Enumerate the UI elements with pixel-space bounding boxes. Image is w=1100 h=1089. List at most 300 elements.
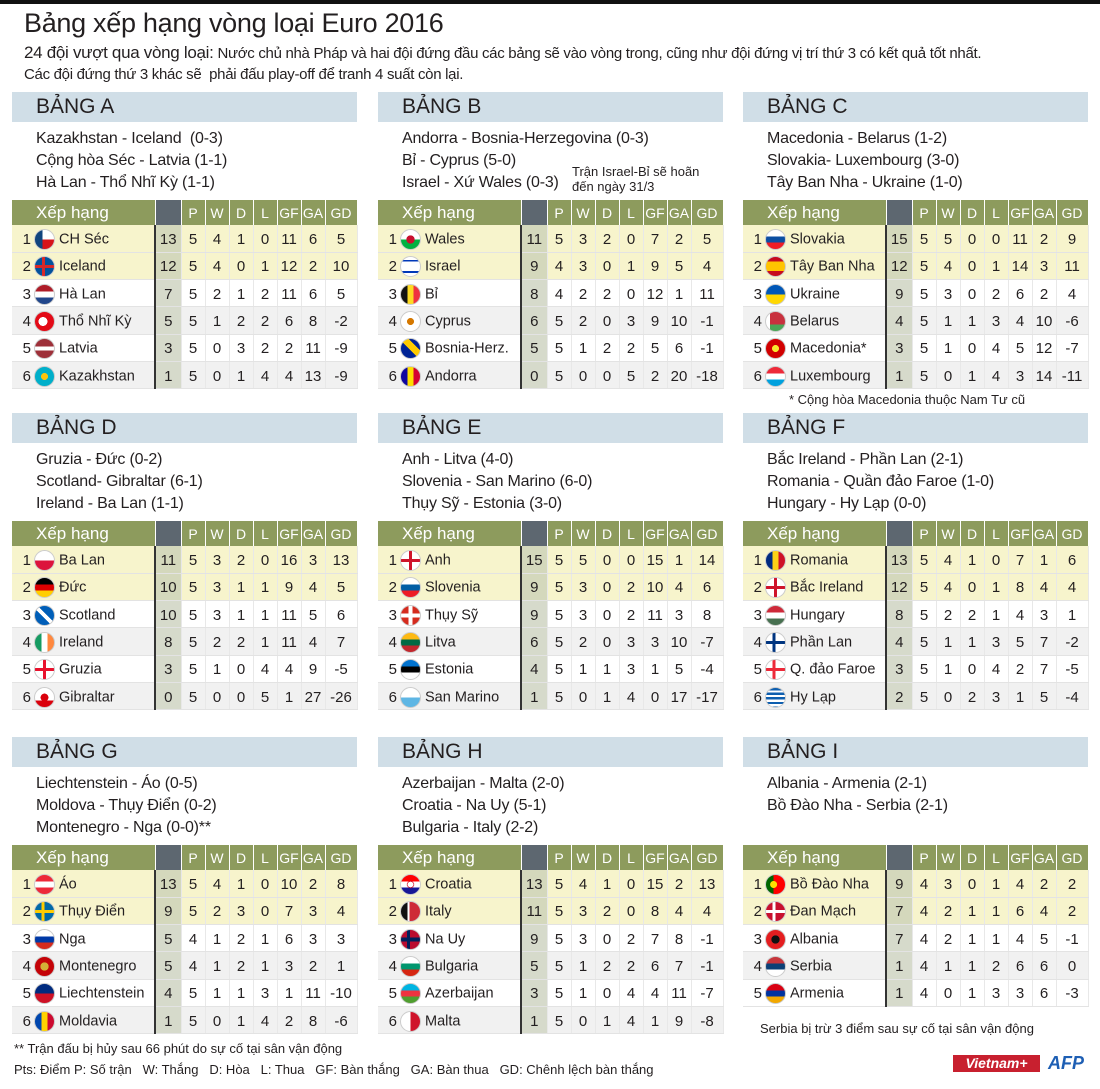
panel: group F: Hungary - Hy Lạp (0-0)	[767, 495, 926, 512]
panel: group G: GA	[303, 850, 323, 866]
panel: group A: 5	[189, 340, 197, 357]
panel: group F: 12	[891, 579, 908, 596]
panel: group E: 0	[603, 579, 611, 596]
panel: group C: 11	[1012, 231, 1028, 248]
legend: Pts: Điểm P: Số trận W: Thắng D: Hòa L: Thua GF: Bàn thắng GA: Bàn thua GD: Chênh lệch bàn thắng	[14, 1062, 654, 1077]
panel: group E: 2	[627, 607, 635, 624]
panel: group B: 1	[675, 286, 683, 303]
panel: group A: Hà Lan	[59, 286, 106, 302]
panel: group H: 1	[389, 876, 397, 893]
panel: group I: -1	[1065, 931, 1079, 948]
panel: group D: 5	[309, 607, 317, 624]
panel: group C: 2	[992, 286, 1000, 303]
panel: group I: 6	[1040, 958, 1048, 975]
panel: group I: 2	[1068, 876, 1076, 893]
panel: group C: 4	[895, 313, 903, 330]
panel: group C: Luxembourg	[790, 368, 871, 384]
panel: group G: 1	[23, 876, 31, 893]
panel: group A: 2	[309, 258, 317, 275]
panel: group C: 9	[895, 286, 903, 303]
panel: group A: W	[210, 204, 224, 220]
panel: group A: 13	[305, 368, 321, 385]
panel: group H: 5	[555, 985, 563, 1002]
panel: group F: 5	[1040, 689, 1048, 706]
subtitle	[24, 43, 981, 83]
panel: group C: Slovakia- Luxembourg (3-0)	[767, 152, 959, 169]
panel: group H: 0	[579, 1013, 587, 1030]
panel: group C: 1	[944, 313, 952, 330]
panel: group D: 6	[337, 607, 345, 624]
panel: group F: 0	[944, 689, 952, 706]
panel: group H: 5	[555, 931, 563, 948]
panel: group B: 2	[579, 313, 587, 330]
panel: group H: 6	[389, 1013, 397, 1030]
panel: group A: Latvia	[59, 341, 98, 357]
panel: group B: BẢNG B	[402, 95, 481, 118]
panel: group D: Ireland - Ba Lan (1-1)	[36, 495, 184, 512]
panel: group I: 9	[895, 876, 903, 893]
panel: group A: Thổ Nhĩ Kỳ	[59, 313, 132, 329]
panel: group D: -5	[334, 661, 348, 678]
panel: group E: 15	[526, 552, 543, 569]
panel: group E: 8	[703, 607, 711, 624]
panel: group H: 13	[699, 876, 715, 893]
panel: group F: 0	[968, 579, 976, 596]
panel: group A: Iceland	[59, 259, 106, 275]
panel: group E: 3	[675, 607, 683, 624]
panel: group H: 1	[530, 1013, 538, 1030]
panel: group A: 3	[237, 340, 245, 357]
panel: group A: Kazakhstan - Iceland (0-3)	[36, 130, 223, 147]
panel: group H: 15	[647, 876, 663, 893]
panel: group H	[378, 737, 724, 1034]
panel: group F: 0	[992, 552, 1000, 569]
panel: group C: 5	[920, 258, 928, 275]
panel: group D: 3	[164, 661, 172, 678]
panel: group A: 2	[261, 340, 269, 357]
panel: group D: Scotland- Gibraltar (6-1)	[36, 473, 203, 490]
panel: group E: 0	[651, 689, 659, 706]
panel: group D: 3	[213, 607, 221, 624]
panel: group H: 0	[627, 876, 635, 893]
panel: group F: 8	[1016, 579, 1024, 596]
panel: group A: 11	[281, 286, 297, 303]
panel: group I: 7	[895, 931, 903, 948]
panel: group G: 3	[285, 958, 293, 975]
panel: group I	[743, 737, 1089, 1036]
panel: group G: 4	[337, 903, 345, 920]
panel: group E: 0	[603, 634, 611, 651]
panel: group H: 2	[675, 876, 683, 893]
panel: group H: 4	[627, 1013, 635, 1030]
panel: group G: GF	[279, 850, 299, 866]
panel: group D: 2	[237, 634, 245, 651]
panel: group F: 4	[944, 579, 952, 596]
panel: group B: 5	[389, 340, 397, 357]
panel: group G: 5	[23, 985, 31, 1002]
panel: group C: 2	[1040, 231, 1048, 248]
panel: group H: Xếp hạng	[402, 848, 475, 866]
panel: group G: 0	[261, 876, 269, 893]
panel: group C: Macedonia - Belarus (1-2)	[767, 130, 947, 147]
panel: group E: Estonia	[425, 662, 473, 678]
panel: group D: D	[236, 526, 246, 542]
panel: group G: 5	[189, 903, 197, 920]
panel: group C: 14	[1012, 258, 1028, 275]
panel: group G: Áo	[59, 876, 77, 892]
panel: group G: 3	[261, 985, 269, 1002]
panel: group I: 3	[1016, 985, 1024, 1002]
panel: group I: Đan Mạch	[790, 904, 856, 920]
panel: group F: 4	[1040, 579, 1048, 596]
panel: group A: L	[261, 204, 269, 220]
panel: group D: 0	[237, 689, 245, 706]
panel: group E: 1	[675, 552, 683, 569]
panel: group E: 3	[389, 607, 397, 624]
note: Israel-Belgium postponed: Trận Israel-Bỉ sẽ hoãn	[572, 164, 699, 179]
panel: group G: 2	[23, 903, 31, 920]
panel: group G: Liechtenstein	[59, 986, 144, 1002]
panel: group C: 5	[944, 231, 952, 248]
panel: group A: 3	[23, 286, 31, 303]
panel: group H: 9	[530, 931, 538, 948]
panel: group D: 4	[261, 661, 269, 678]
panel: group F: 2	[1016, 661, 1024, 678]
panel: group D: 0	[261, 552, 269, 569]
panel: group D: 1	[237, 607, 245, 624]
panel: group B: 6	[675, 340, 683, 357]
panel: group E: 1	[603, 689, 611, 706]
panel: group F: -4	[1065, 689, 1079, 706]
panel: group E: 15	[647, 552, 663, 569]
panel: group G: 4	[189, 931, 197, 948]
panel: group F: 1	[944, 661, 952, 678]
panel: group A: Cộng hòa Séc - Latvia (1-1)	[36, 152, 227, 169]
panel: group D: 2	[23, 579, 31, 596]
panel: group D: Gruzia - Đức (0-2)	[36, 451, 162, 468]
panel: group D: Đức	[59, 580, 86, 596]
panel: group E: 0	[603, 607, 611, 624]
panel: group F: Hungary	[790, 607, 845, 623]
panel: group B: Andorra	[425, 368, 477, 384]
panel: group H: Azerbaijan	[425, 986, 494, 1002]
panel: group A: BẢNG A	[36, 95, 114, 118]
panel: group C: 10	[1036, 313, 1052, 330]
panel: group F: 5	[920, 661, 928, 678]
panel: group A: 5	[189, 231, 197, 248]
panel: group C: 4	[992, 340, 1000, 357]
panel: group F: 5	[920, 579, 928, 596]
panel: group B: 1	[389, 231, 397, 248]
panel: group G: 3	[309, 931, 317, 948]
panel: group A: 7	[164, 286, 172, 303]
panel: group D: 5	[189, 607, 197, 624]
panel: group G: 0	[213, 1013, 221, 1030]
panel: group D: 5	[189, 579, 197, 596]
panel: group E: 0	[603, 552, 611, 569]
panel: group A: 0	[237, 258, 245, 275]
panel: group G: Moldavia	[59, 1013, 117, 1029]
panel: group I: 4	[1040, 903, 1048, 920]
panel: group I: 1	[895, 958, 903, 975]
panel: group G: 4	[213, 876, 221, 893]
subtitle: 24 đội vượt qua vòng loại: Nước chủ nhà Pháp và hai đội đứng đầu các bảng sẽ vào vòng trong, cũng như đội đứng vị trí thứ 3 có kết quả tốt nhất.	[24, 43, 981, 62]
panel: group C: 6	[1016, 286, 1024, 303]
panel: group G: Nga	[59, 931, 86, 947]
panel: group B: 5	[651, 340, 659, 357]
panel: group H: -8	[700, 1013, 714, 1030]
panel: group D: 10	[160, 607, 177, 624]
panel: group E: 6	[389, 689, 397, 706]
panel: group C: 0	[944, 368, 952, 385]
panel: group F: Bắc Ireland	[790, 580, 863, 596]
panel: group H: 4	[389, 958, 397, 975]
panel: group E: Thụy Sỹ	[425, 607, 478, 623]
panel: group A: 5	[189, 368, 197, 385]
panel: group E: 1	[651, 661, 659, 678]
panel: group G: 1	[261, 931, 269, 948]
panel: group D	[12, 413, 358, 710]
panel: group I: 1	[968, 985, 976, 1002]
panel: group F: GF	[1010, 526, 1030, 542]
panel: group F: 4	[895, 634, 903, 651]
panel: group G: 2	[309, 876, 317, 893]
panel: group D: Gibraltar	[59, 689, 115, 705]
panel: group I: 4	[1016, 876, 1024, 893]
panel: group I: 0	[1068, 958, 1076, 975]
panel: group E: L	[627, 526, 635, 542]
panel: group E: GD	[697, 526, 718, 542]
panel: group E: 5	[555, 607, 563, 624]
panel: group I: Serbia	[790, 958, 832, 974]
panel: group B: 3	[579, 231, 587, 248]
panel: group C: 3	[895, 340, 903, 357]
panel: group I: 4	[1016, 931, 1024, 948]
panel: group B: 2	[603, 340, 611, 357]
panel: group G: W	[210, 850, 224, 866]
panel: group B: Bosnia-Herz.	[425, 341, 509, 357]
panel: group B: 4	[555, 286, 563, 303]
panel: group I: 2	[992, 958, 1000, 975]
panel: group G: 3	[23, 931, 31, 948]
panel: group H: 2	[603, 958, 611, 975]
panel: group D: 3	[309, 552, 317, 569]
panel: group A: Hà Lan - Thổ Nhĩ Kỳ (1-1)	[36, 174, 215, 191]
panel: group A: -2	[334, 313, 348, 330]
panel: group C: 1	[944, 340, 952, 357]
panel: group D: 7	[337, 634, 345, 651]
panel: group D: BẢNG D	[36, 416, 117, 439]
panel: group C: Tây Ban Nha	[790, 259, 875, 275]
panel: group H: 4	[651, 985, 659, 1002]
panel: group G: 3	[309, 903, 317, 920]
panel: group C: -6	[1065, 313, 1079, 330]
panel: group F: 5	[920, 634, 928, 651]
panel: group F: Phần Lan	[790, 634, 852, 650]
panel: group D: 5	[23, 661, 31, 678]
panel: group B: 1	[579, 340, 587, 357]
panel: group E: -17	[696, 689, 718, 706]
panel: group H: 3	[579, 903, 587, 920]
panel: group F: 8	[895, 607, 903, 624]
panel: group G: 6	[285, 931, 293, 948]
panel: group F: 1	[1068, 607, 1076, 624]
panel: group B: 2	[603, 231, 611, 248]
panel: group B: 5	[530, 340, 538, 357]
panel: group C: 0	[968, 340, 976, 357]
panel: group A: 1	[213, 313, 221, 330]
panel: group H: 5	[389, 985, 397, 1002]
panel: group A: 5	[23, 340, 31, 357]
panel: group G: 5	[189, 985, 197, 1002]
panel: group C: 2	[754, 258, 762, 275]
panel: group H: Italy	[425, 904, 452, 920]
panel: group G: Thụy Điển	[59, 904, 125, 920]
panel: group G: Moldova - Thụy Điển (0-2)	[36, 797, 217, 814]
panel: group A	[12, 92, 358, 389]
panel: group G: 5	[164, 958, 172, 975]
panel: group B: 0	[603, 368, 611, 385]
panel: group C: Macedonia*	[790, 341, 867, 357]
panel: group C: Belarus	[790, 313, 839, 329]
panel: group C: 3	[992, 313, 1000, 330]
panel: group F: BẢNG F	[767, 416, 845, 439]
panel: group D: 0	[237, 661, 245, 678]
panel: group I: D	[967, 850, 977, 866]
panel: group B: 1	[627, 258, 635, 275]
panel: group B: 2	[579, 286, 587, 303]
panel: group G: 2	[285, 1013, 293, 1030]
panel: group A: 1	[23, 231, 31, 248]
note: Israel-Belgium postponed: đến ngày 31/3	[572, 179, 654, 194]
panel: group G: 10	[281, 876, 297, 893]
panel: group E: -4	[700, 661, 714, 678]
panel: group D: GA	[303, 526, 323, 542]
panel: group C: 4	[944, 258, 952, 275]
panel: group G: 5	[189, 876, 197, 893]
panel: group A: Kazakhstan	[59, 368, 135, 384]
panel: group A: 8	[309, 313, 317, 330]
panel: group I: 5	[754, 985, 762, 1002]
panel: group F: 3	[895, 661, 903, 678]
panel: group H: 3	[579, 931, 587, 948]
panel: group B: 9	[651, 313, 659, 330]
note: Israel-Belgium postponed	[572, 164, 699, 194]
panel: group F: 1	[968, 634, 976, 651]
panel: group G: 1	[261, 958, 269, 975]
panel: group H: -1	[700, 958, 714, 975]
panel: group C: 4	[754, 313, 762, 330]
panel: group H: -7	[700, 985, 714, 1002]
panel: group E: 0	[579, 689, 587, 706]
panel: group F: 1	[1016, 689, 1024, 706]
panel: group C: 5	[920, 286, 928, 303]
panel: group B: P	[554, 204, 564, 220]
panel: group F: 1	[754, 552, 762, 569]
panel: group E: 1	[389, 552, 397, 569]
panel: group A: 2	[285, 340, 293, 357]
panel: group D: 1	[285, 689, 293, 706]
panel: group I: W	[941, 850, 955, 866]
panel: group D: 4	[309, 634, 317, 651]
panel: group B: Andorra - Bosnia-Herzegovina (0-3)	[402, 130, 649, 147]
panel: group B: 0	[579, 368, 587, 385]
panel: group B: 5	[627, 368, 635, 385]
panel: group E: Xếp hạng	[402, 524, 475, 542]
panel: group B: 0	[530, 368, 538, 385]
panel: group D: L	[261, 526, 269, 542]
panel: group G: 1	[237, 1013, 245, 1030]
panel: group F: 3	[754, 607, 762, 624]
panel: group E	[378, 413, 724, 710]
panel: group D: 5	[189, 689, 197, 706]
panel: group D: 5	[261, 689, 269, 706]
panel: group I: 4	[920, 958, 928, 975]
panel: group I: L	[992, 850, 1000, 866]
panel: group E: 0	[627, 552, 635, 569]
panel: group A: 5	[337, 286, 345, 303]
panel: group D: 3	[23, 607, 31, 624]
panel: group G: 4	[189, 958, 197, 975]
panel: group A: 11	[305, 340, 321, 357]
panel: group B: 5	[555, 231, 563, 248]
panel: group C: 0	[992, 231, 1000, 248]
panel: group E: 3	[651, 634, 659, 651]
panel: group F: 2	[754, 579, 762, 596]
panel: group G: Liechtenstein - Áo (0-5)	[36, 775, 198, 792]
panel: group C: 3	[754, 286, 762, 303]
panel: group B: GF	[645, 204, 665, 220]
panel: group E: 3	[579, 579, 587, 596]
panel: group G: Montenegro - Nga (0-0)**	[36, 819, 211, 836]
panel: group I: GF	[1010, 850, 1030, 866]
panel: group G: L	[261, 850, 269, 866]
panel: group B: 2	[603, 286, 611, 303]
panel: group D: 0	[164, 689, 172, 706]
panel: group A: 6	[285, 313, 293, 330]
panel: group H: 13	[526, 876, 543, 893]
panel: group A: 4	[213, 258, 221, 275]
panel: group B: 10	[671, 313, 687, 330]
panel: group A: 2	[261, 313, 269, 330]
panel: group E: 10	[647, 579, 663, 596]
panel: group C: 4	[1068, 286, 1076, 303]
panel: group F: Romania	[790, 552, 848, 568]
panel: group F: 6	[1068, 552, 1076, 569]
panel: group G: 1	[237, 985, 245, 1002]
panel: group G: 1	[164, 1013, 172, 1030]
panel: group A: 12	[160, 258, 177, 275]
panel: group B: 11	[699, 286, 715, 303]
panel: group H: 11	[671, 985, 687, 1002]
panel: group I: 1	[992, 903, 1000, 920]
panel: group C: 5	[920, 340, 928, 357]
panel: group F: 1	[968, 552, 976, 569]
panel: group E: 6	[703, 579, 711, 596]
panel: group F: W	[941, 526, 955, 542]
note: Macedonia: * Cộng hòa Macedonia thuộc Nam Tư cũ	[789, 392, 1025, 407]
panel: group I: 6	[1016, 903, 1024, 920]
panel: group C: BẢNG C	[767, 95, 848, 118]
panel: group G: 3	[237, 903, 245, 920]
panel: group G: 5	[164, 931, 172, 948]
panel: group G: -6	[334, 1013, 348, 1030]
panel: group D: 1	[261, 607, 269, 624]
panel: group D: 11	[281, 634, 297, 651]
panel: group A: 6	[23, 368, 31, 385]
panel: group E: Slovenia - San Marino (6-0)	[402, 473, 592, 490]
panel: group A: CH Séc	[59, 231, 109, 247]
